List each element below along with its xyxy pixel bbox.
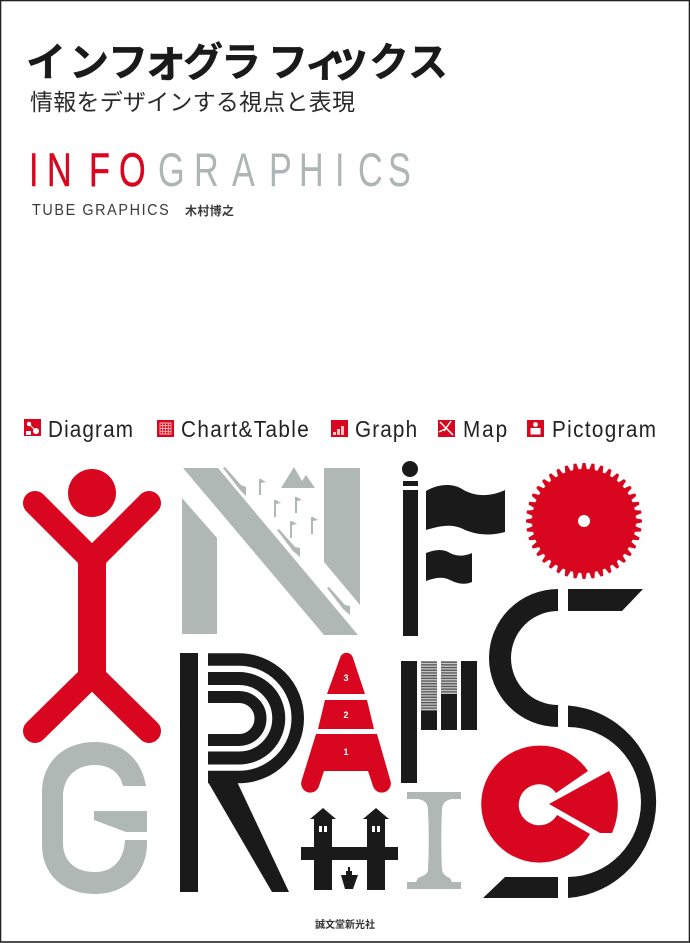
- small flags: [259, 479, 318, 538]
- mountain: [281, 467, 315, 488]
- title: ィ: [304, 30, 344, 88]
- english title: [29, 144, 411, 196]
- letter F: pole with flags: [402, 461, 505, 636]
- title: ク: [369, 30, 409, 88]
- letter S: black curved bands: [483, 589, 656, 898]
- icon: pictogram: [527, 420, 544, 437]
- label: graph: Graph: [355, 416, 417, 442]
- letter I: red person pictogram: [35, 469, 149, 731]
- publisher: 誠文堂新光社: [315, 916, 375, 931]
- rods: [223, 467, 350, 615]
- letter F: bar chart: [401, 661, 477, 783]
- legend: [24, 416, 656, 442]
- icon: diagram: [24, 419, 41, 436]
- letter A: red tiered pyramid chart: 3: [343, 673, 349, 683]
- label: map: Map: [463, 416, 507, 442]
- title: フ: [268, 30, 308, 88]
- english title: INFO: [29, 144, 146, 196]
- authors: TUBE GRAPHICS: [32, 201, 169, 219]
- letter O: red gear: [526, 463, 642, 579]
- title: グ: [183, 30, 223, 88]
- icon: graph: [331, 420, 348, 437]
- letter G: gray: [42, 742, 147, 894]
- label: diagram: Diagram: [48, 416, 133, 442]
- title: ン: [69, 30, 109, 88]
- authors: 木村博之: [185, 202, 234, 219]
- letter A: red tiered pyramid chart: 1: [343, 747, 349, 757]
- letter A: red tiered pyramid chart: 2: [343, 710, 349, 720]
- letter H: bridge with towers and ship: [301, 808, 398, 890]
- label: pictogram: Pictogram: [552, 416, 656, 442]
- title: ラ: [221, 30, 261, 88]
- subtitle: 情報をデザインする視点と表現: [30, 83, 355, 117]
- label: chart and table: Chart&Table: [181, 416, 309, 442]
- letter A: red tiered pyramid chart: [301, 653, 391, 793]
- letter I: gray column: [407, 792, 461, 889]
- title: ォ: [142, 24, 188, 90]
- title: ス: [408, 30, 448, 88]
- icon: map: [438, 420, 455, 437]
- letter C: red pie chart: [481, 746, 618, 863]
- ship: [341, 867, 358, 889]
- title: ッ: [325, 24, 371, 90]
- title: フ: [108, 30, 148, 88]
- icon: chart and table: [157, 420, 174, 437]
- english title: GRAPHICS: [158, 144, 411, 196]
- letter N: gray with flags and mountain map: [182, 467, 360, 635]
- title: イ: [26, 30, 66, 88]
- authors: [32, 201, 234, 219]
- letter R: running track: [180, 653, 298, 892]
